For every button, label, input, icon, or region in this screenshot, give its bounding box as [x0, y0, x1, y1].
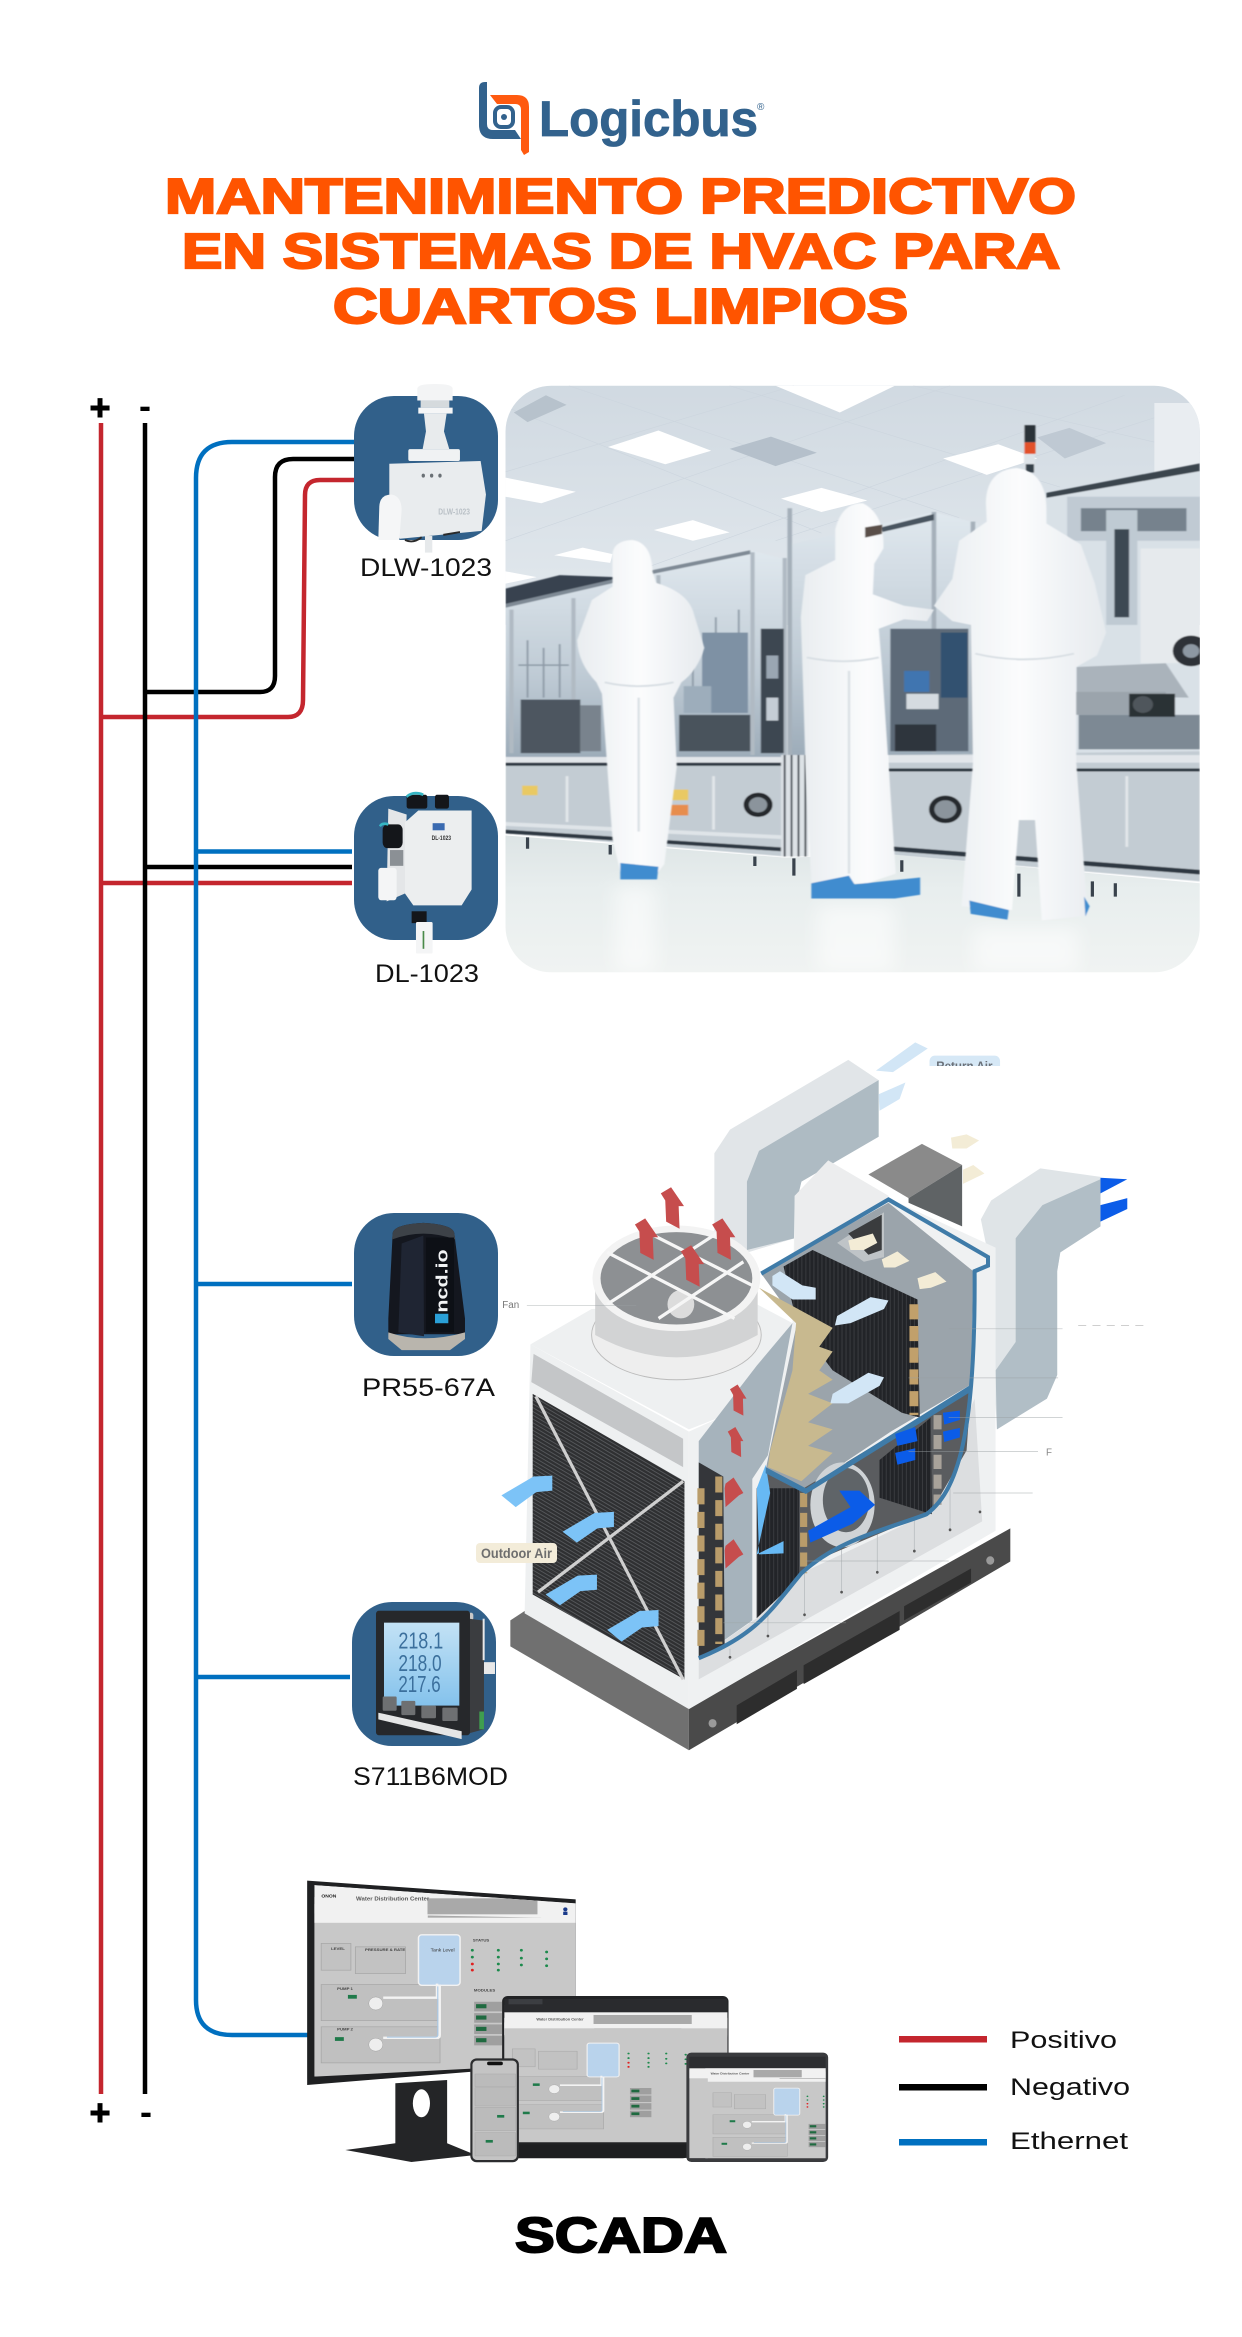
icon: DL-1023 data logger: DL-1023	[432, 836, 451, 842]
device: tablet	[686, 2052, 828, 2162]
base cabinets	[506, 751, 1200, 881]
device: monitor: LEVEL	[331, 1946, 345, 1951]
device: tablet: Water Distribution Center	[711, 2072, 750, 2076]
title: EN SISTEMAS DE HVAC PARA	[182, 225, 1060, 279]
duct: supply air	[981, 1168, 1100, 1429]
registered mark: ®	[757, 102, 765, 113]
device tile: S711B6MOD	[352, 1602, 496, 1746]
device: monitor: PUMP 1	[337, 1986, 354, 1991]
label: F fragment: F	[1046, 1447, 1052, 1458]
copper coil left	[699, 1462, 725, 1658]
title: MANTENIMIENTO PREDICTIVO	[165, 170, 1076, 224]
wire: positive bus and branches	[101, 423, 356, 2094]
icon: logo mark	[479, 82, 529, 155]
device: monitor: ONON	[321, 1893, 337, 1899]
arrows: exhaust air	[635, 1187, 747, 1569]
diagram: HVAC air handling unit cutaway	[501, 1042, 1150, 1750]
device: laptop: Water Distribution Center	[536, 2018, 584, 2022]
legend	[899, 2027, 1130, 2155]
icon: S711 power meter	[376, 1611, 495, 1739]
cutaway outline	[699, 1200, 988, 1658]
label: Fan: Fan	[502, 1300, 519, 1311]
person 1	[577, 540, 704, 879]
floor	[506, 835, 1200, 972]
machine feet	[528, 837, 1115, 897]
arrows: return air inside	[772, 1042, 928, 1403]
logo wordmark: Logicbus	[539, 91, 758, 147]
icon: S711 power meter: 218.0	[398, 1651, 442, 1676]
icon: PR55-67A vibration sensor	[388, 1223, 465, 1350]
label: Mixing Section fragment	[1078, 1324, 1150, 1326]
arrows: outdoor air	[501, 1476, 659, 1642]
person 3	[934, 468, 1106, 920]
legend: Negativo	[899, 2074, 1130, 2101]
title: CUARTOS LIMPIOS	[333, 280, 908, 334]
wiring diagram	[101, 423, 356, 2094]
legend: Positivo	[899, 2027, 1117, 2054]
left machine	[506, 550, 787, 757]
device: phone	[470, 2058, 519, 2162]
partition edge	[766, 1384, 971, 1494]
wire: ethernet bus and branches	[196, 442, 356, 2035]
device: monitor: MODULES	[474, 1988, 495, 1993]
arrows: supply air	[808, 1178, 1127, 1543]
interior upper compartment	[761, 1203, 973, 1500]
duct	[506, 575, 615, 606]
label: DL-1023: DL-1023	[375, 960, 479, 988]
duct: return air	[714, 1060, 879, 1252]
label: Return Air pill (cropped): Return Air	[936, 1059, 993, 1073]
signal light	[1024, 425, 1035, 473]
middle machine	[789, 508, 978, 755]
right machine	[1046, 463, 1209, 759]
icon: PR55-67A vibration sensor: ncd.io	[432, 1249, 451, 1313]
housing	[525, 1160, 996, 1709]
arrows: mixed air	[848, 1134, 984, 1289]
device: laptop	[502, 1996, 731, 2158]
logo: Logicbus	[479, 82, 765, 155]
device: monitor: STATUS	[473, 1938, 490, 1943]
title	[165, 170, 1076, 334]
SCADA devices	[307, 1880, 828, 2162]
label: DLW-1023: DLW-1023	[360, 554, 492, 582]
device tile: PR55-67A	[354, 1213, 498, 1356]
exhaust box	[868, 1144, 962, 1226]
label: Return Air pill (cropped)	[930, 1056, 1000, 1066]
device tile: DLW-1023	[354, 384, 498, 553]
device: monitor: Water Distribution Center	[356, 1897, 430, 1903]
label: Outdoor Air badge: Outdoor Air	[481, 1545, 552, 1561]
legend: Ethernet	[899, 2128, 1128, 2155]
device: monitor	[307, 1881, 606, 2162]
outdoor coil grille	[533, 1394, 684, 1679]
base	[510, 1528, 1010, 1750]
label: PR55-67A: PR55-67A	[362, 1374, 495, 1402]
panel: cleanroom photo	[500, 380, 1216, 972]
heading: SCADA: SCADA	[515, 2209, 727, 2263]
icon: DLW-1023 weather station: DLW-1023	[438, 507, 470, 516]
lower compartment	[757, 1387, 971, 1618]
device: monitor: PRESSURE & RATE	[365, 1947, 405, 1952]
floor reflections	[620, 888, 1068, 962]
fan assembly	[592, 1225, 761, 1380]
icon: DL-1023 data logger	[378, 793, 472, 954]
person 2	[801, 503, 934, 899]
filter bank	[759, 1288, 833, 1481]
legend: Negativo: Negativo	[1010, 2074, 1130, 2101]
icon: S711 power meter: 218.1	[398, 1629, 443, 1654]
label: S711B6MOD: S711B6MOD	[353, 1763, 508, 1791]
legend: Ethernet: Ethernet	[1010, 2128, 1128, 2155]
device: monitor: Tank Level	[431, 1948, 455, 1954]
bus polarity bottom plus: +	[89, 2092, 111, 2133]
device tile: DL-1023	[354, 793, 498, 954]
leader lines	[527, 1306, 1063, 1623]
bus polarity top plus: +	[89, 387, 111, 428]
ceiling	[500, 380, 1216, 625]
bus polarity top minus: -	[139, 385, 151, 426]
legend: Positivo: Positivo	[1010, 2027, 1117, 2054]
icon: S711 power meter: 217.6	[398, 1673, 441, 1698]
bus polarity bottom minus: -	[140, 2091, 152, 2132]
wire: negative bus and branches	[143, 423, 356, 2094]
device: monitor: PUMP 2	[337, 2027, 354, 2032]
icon: DLW-1023 weather station	[378, 384, 486, 553]
